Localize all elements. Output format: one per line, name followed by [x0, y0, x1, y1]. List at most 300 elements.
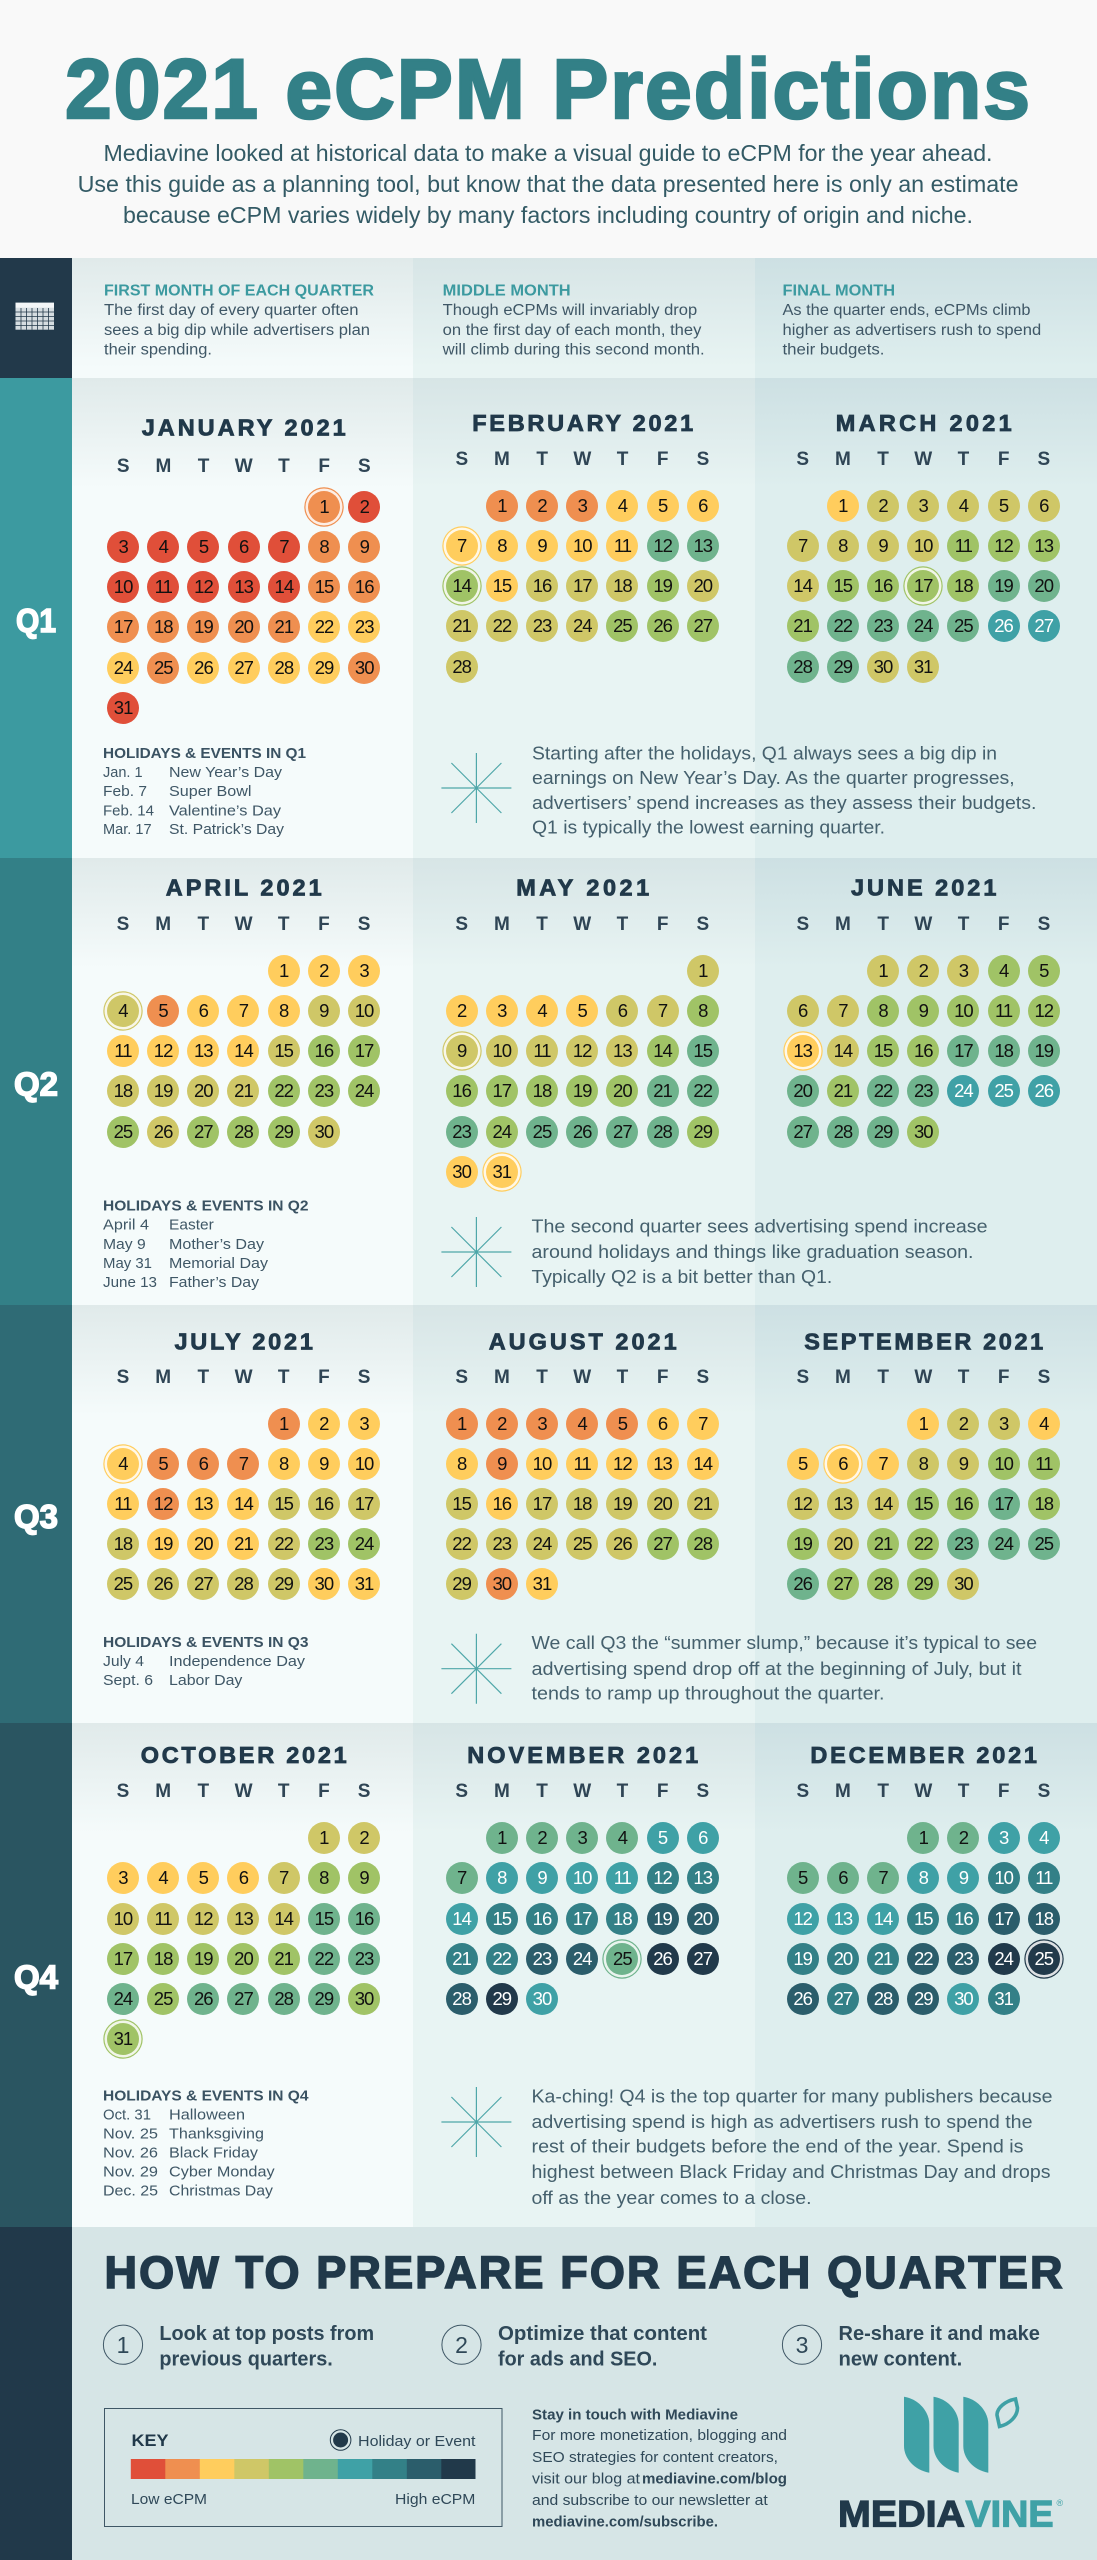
text: 7 — [658, 1000, 667, 1021]
text: 27 — [653, 1533, 672, 1554]
text: 8 — [838, 535, 847, 556]
text: 16 — [533, 575, 551, 596]
text: 17 — [114, 1948, 132, 1969]
text: 12 — [194, 1908, 213, 1929]
text: 22 — [452, 1533, 471, 1554]
text: 14 — [234, 1040, 253, 1061]
text: 3 — [359, 1413, 369, 1434]
text: 19 — [793, 1533, 812, 1554]
text: 11 — [614, 1867, 631, 1888]
calendar: February 2021 — [442, 410, 719, 683]
text: 1 — [878, 960, 888, 981]
calendar: December 2021 — [787, 1742, 1064, 2015]
text: 14 — [274, 1908, 293, 1929]
text: 22 — [833, 615, 852, 636]
title: 2021 eCPM Predictions — [65, 42, 1030, 136]
text: T — [536, 1781, 548, 1802]
text: 9 — [457, 1040, 466, 1061]
text: 30 — [492, 1573, 511, 1594]
text: 27 — [694, 615, 712, 636]
text: 23 — [355, 616, 374, 637]
text: 8 — [497, 535, 507, 556]
text: 12 — [793, 1908, 812, 1929]
text: W — [914, 1367, 932, 1388]
text: 10 — [994, 1453, 1013, 1474]
text: 18 — [613, 575, 632, 596]
text: first month of each quarter: The first day of every quarter often — [104, 302, 358, 319]
text: 24 — [994, 1533, 1013, 1554]
text: 10 — [914, 535, 932, 556]
text: S — [696, 914, 709, 935]
text: T — [198, 1781, 209, 1802]
text: 23 — [492, 1533, 511, 1554]
text: 17 — [914, 575, 932, 596]
text: 20 — [194, 1080, 213, 1101]
icon: star Q3 — [441, 1634, 511, 1704]
text: 4 — [158, 1867, 168, 1888]
text: 7 — [457, 1867, 466, 1888]
text: W — [573, 1367, 591, 1388]
text: 10 — [114, 1908, 132, 1929]
text: 11 — [533, 1040, 551, 1061]
text: 29 — [833, 656, 852, 677]
step 3: new content. — [838, 2349, 962, 2371]
text: 13 — [653, 1453, 672, 1474]
text: 29 — [914, 1988, 933, 2009]
text: 11 — [1035, 1867, 1052, 1888]
holidays list: Q1: Feb. 14 — [103, 802, 154, 820]
text: 13 — [234, 576, 253, 597]
text: 15 — [452, 1493, 471, 1514]
text: 18 — [154, 1948, 172, 1969]
text: 28 — [874, 1573, 892, 1594]
text: 1 — [319, 496, 329, 517]
text: 28 — [693, 1533, 712, 1554]
text: S — [796, 1367, 809, 1388]
text: 13 — [834, 1493, 852, 1514]
text: M — [835, 449, 851, 470]
holidays list: Q1: Mar. 17 — [103, 821, 152, 838]
text: 30 — [315, 1121, 333, 1142]
text: 6 — [239, 1867, 248, 1888]
text: 12 — [613, 1453, 632, 1474]
text: 25 — [114, 1573, 132, 1594]
holidays list: Q2 — [103, 1198, 308, 1291]
text: MARCH 2021 — [835, 410, 1011, 436]
text: 23 — [914, 1080, 933, 1101]
text: 28 — [274, 1988, 293, 2009]
text: 6 — [698, 495, 707, 516]
text: 23 — [315, 1080, 333, 1101]
text: 7 — [279, 536, 288, 557]
text: 21 — [275, 616, 293, 637]
text: 28 — [234, 1573, 253, 1594]
text: S — [1038, 914, 1050, 935]
text: S — [455, 449, 468, 470]
text: 21 — [874, 1533, 892, 1554]
text: 20 — [693, 1908, 712, 1929]
text: middle month: will climb during this second month. — [442, 342, 705, 358]
step 2: 2 — [455, 2332, 468, 2358]
text: 10 — [573, 1867, 591, 1888]
text: 11 — [114, 1040, 132, 1061]
text: 18 — [1035, 1493, 1053, 1514]
text: T — [958, 1781, 969, 1802]
holidays list: Q4: Nov. 26 — [103, 2144, 158, 2162]
text: 29 — [315, 1988, 333, 2009]
text: S — [358, 914, 370, 935]
holidays list: Q2: April 4 — [103, 1216, 149, 1234]
text: 12 — [194, 576, 213, 597]
text: 13 — [793, 1040, 812, 1061]
text: 2 — [359, 1827, 369, 1848]
text: 3 — [959, 960, 968, 981]
text: S — [796, 1781, 809, 1802]
holidays list: Q2: Memorial Day — [169, 1255, 269, 1272]
text: 31 — [114, 697, 132, 718]
text: first month of each quarter: FIRST MONTH OF EACH QUARTER — [104, 282, 374, 300]
text: 29 — [492, 1988, 511, 2009]
text: F — [998, 914, 1010, 935]
text: 7 — [279, 1867, 288, 1888]
holidays list: Q3: HOLIDAYS & EVENTS IN Q3 — [103, 1634, 308, 1651]
text: 8 — [279, 1000, 288, 1021]
text: 13 — [1034, 535, 1053, 556]
text: 14 — [452, 1908, 471, 1929]
text: 17 — [114, 616, 132, 637]
icon: star Q4 — [441, 2087, 511, 2157]
text: 21 — [274, 1948, 293, 1969]
text: 3 — [118, 1867, 128, 1888]
text: 23 — [533, 615, 551, 636]
text: 24 — [492, 1121, 511, 1142]
text: M — [155, 456, 171, 477]
text: 9 — [878, 535, 888, 556]
text: 1 — [319, 1827, 328, 1848]
text: T — [198, 456, 209, 477]
text: 8 — [497, 1867, 506, 1888]
text: 4 — [618, 1827, 627, 1848]
text: JUNE 2021 — [851, 874, 996, 900]
text: W — [235, 1367, 253, 1388]
text: final month: FINAL MONTH — [782, 282, 895, 300]
text: 19 — [653, 1908, 672, 1929]
text: 2 — [537, 1827, 547, 1848]
text: 4 — [159, 536, 168, 557]
text: 12 — [573, 1040, 591, 1061]
key legend: High eCPM — [395, 2491, 475, 2508]
text: 5 — [158, 1453, 168, 1474]
text: 21 — [834, 1080, 852, 1101]
text: T — [877, 449, 889, 470]
paragraph: Q4 — [532, 2087, 1052, 2208]
text: 6 — [838, 1453, 848, 1474]
text: 30 — [954, 1573, 973, 1594]
band: Q2 background — [0, 858, 1097, 1305]
text: 15 — [492, 1908, 511, 1929]
text: 13 — [234, 1908, 253, 1929]
text: 20 — [834, 1948, 852, 1969]
text: 2 — [457, 1000, 466, 1021]
text: 29 — [315, 657, 333, 678]
calendar: May 2021 — [442, 874, 719, 1192]
text: 9 — [919, 1000, 928, 1021]
text: 17 — [492, 1080, 511, 1101]
text: 25 — [1035, 1948, 1053, 1969]
text: T — [198, 914, 209, 935]
text: stay in touch: mediavine.com/subscribe. — [532, 2514, 718, 2531]
text: T — [617, 914, 628, 935]
text: 7 — [457, 535, 466, 556]
text: 2 — [319, 960, 328, 981]
text: 5 — [798, 1453, 807, 1474]
text: M — [835, 1367, 851, 1388]
text: 14 — [874, 1493, 892, 1514]
text: 18 — [533, 1080, 551, 1101]
text: 25 — [154, 1988, 172, 2009]
text: 1 — [279, 1413, 288, 1434]
key legend: Low eCPM — [131, 2491, 207, 2508]
text: 1 — [919, 1413, 928, 1434]
holidays list: Q2: Father’s Day — [169, 1274, 260, 1291]
text: 2 — [878, 495, 888, 516]
text: 26 — [154, 1573, 172, 1594]
paragraph: Q4: highest between Black Friday and Christmas Day and drops — [532, 2162, 1050, 2182]
holidays list: Q1: St. Patrick’s Day — [169, 821, 285, 838]
text: 7 — [838, 1000, 848, 1021]
holidays list: Q1: New Year’s Day — [169, 764, 283, 781]
paragraph: Q2: around holidays and things like graduation season. — [532, 1242, 974, 1262]
text: F — [657, 1367, 668, 1388]
text: 13 — [194, 1040, 213, 1061]
text: 26 — [653, 615, 672, 636]
text: 1 — [919, 1827, 928, 1848]
text: 2 — [537, 495, 547, 516]
text: W — [235, 914, 253, 935]
text: 29 — [452, 1573, 471, 1594]
text: 24 — [914, 615, 932, 636]
text: 9 — [319, 1453, 328, 1474]
icon: star Q1 — [441, 753, 511, 823]
text: 9 — [537, 535, 547, 556]
text: M — [835, 1781, 851, 1802]
text: 12 — [994, 535, 1013, 556]
text: stay in touch — [532, 2406, 787, 2531]
text: F — [657, 914, 668, 935]
paragraph: Q1: advertisers’ spend increases as they assess their budgets. — [532, 793, 1036, 813]
text: 2 — [959, 1413, 968, 1434]
text: 2 — [959, 1827, 968, 1848]
text: 11 — [114, 1493, 132, 1514]
holidays list: Q4: Black Friday — [169, 2144, 259, 2162]
text: 8 — [698, 1000, 707, 1021]
text: S — [696, 1367, 709, 1388]
text: 3 — [537, 1413, 547, 1434]
holidays list: Q4: HOLIDAYS & EVENTS IN Q4 — [103, 2088, 309, 2104]
text: 21 — [874, 1948, 892, 1969]
key legend: Holiday or Event — [358, 2433, 476, 2450]
text: 8 — [279, 1453, 288, 1474]
text: T — [877, 914, 889, 935]
text: 19 — [1035, 1040, 1053, 1061]
text: T — [958, 1367, 969, 1388]
paragraph: Q2: Typically Q2 is a bit better than Q1. — [532, 1267, 832, 1287]
text: 25 — [573, 1533, 591, 1554]
text: 4 — [1039, 1413, 1048, 1434]
holidays list: Q3: Independence Day — [169, 1653, 306, 1670]
text: T — [617, 1367, 628, 1388]
holidays list: Q4: Nov. 29 — [103, 2164, 158, 2180]
paragraph: Q2: The second quarter sees advertising spend increase — [532, 1217, 988, 1237]
text: 31 — [914, 656, 932, 677]
text: NOVEMBER 2021 — [467, 1742, 698, 1768]
text: FEBRUARY 2021 — [472, 410, 693, 436]
text: 28 — [452, 1988, 471, 2009]
text: 20 — [234, 1948, 253, 1969]
text: 24 — [573, 615, 592, 636]
text: W — [573, 449, 591, 470]
text: T — [958, 914, 969, 935]
text: 15 — [315, 1908, 333, 1929]
text: 22 — [493, 615, 511, 636]
band: header intro background — [0, 258, 1097, 378]
text: 3 — [359, 960, 369, 981]
text: 18 — [954, 575, 973, 596]
text: MAY 2021 — [516, 874, 649, 900]
text: 22 — [914, 1533, 933, 1554]
text: T — [278, 1781, 290, 1802]
text: middle month — [442, 282, 705, 358]
text: 3 — [999, 1827, 1008, 1848]
text: 20 — [793, 1080, 812, 1101]
text: 18 — [114, 1080, 132, 1101]
text: S — [358, 456, 371, 477]
text: 3 — [999, 1413, 1008, 1434]
text: S — [358, 1781, 370, 1802]
text: 30 — [315, 1573, 333, 1594]
text: 24 — [355, 1080, 373, 1101]
text: 23 — [355, 1948, 373, 1969]
text: M — [155, 914, 171, 935]
text: 19 — [994, 575, 1013, 596]
text: 22 — [274, 1080, 293, 1101]
text: 8 — [457, 1453, 466, 1474]
intro text: because eCPM varies widely by many factors including country of origin and niche. — [123, 202, 973, 228]
calendar: July 2021 — [103, 1328, 380, 1600]
intro text — [78, 140, 1019, 228]
text: 6 — [618, 1000, 627, 1021]
text: 5 — [158, 1000, 168, 1021]
logo: Mediavine: VINE — [966, 2494, 1054, 2535]
text: 22 — [492, 1948, 511, 1969]
text: 26 — [994, 615, 1013, 636]
text: 8 — [878, 1000, 888, 1021]
text: 31 — [994, 1988, 1013, 2009]
label: Q4: Q4 — [14, 1958, 59, 1996]
text: 13 — [694, 535, 712, 556]
text: 5 — [658, 1827, 667, 1848]
text: 16 — [315, 1040, 333, 1061]
text: 29 — [274, 1121, 293, 1142]
text: 9 — [537, 1867, 547, 1888]
text: T — [536, 1367, 548, 1388]
text: 26 — [793, 1573, 812, 1594]
text: 4 — [118, 1453, 128, 1474]
text: 30 — [355, 1988, 373, 2009]
text: S — [696, 1781, 709, 1802]
text: W — [235, 456, 253, 477]
text: F — [318, 1367, 330, 1388]
text: 9 — [359, 1867, 369, 1888]
text: 14 — [834, 1040, 852, 1061]
text: M — [494, 449, 510, 470]
text: 19 — [653, 575, 672, 596]
text: 3 — [118, 536, 128, 557]
text: 2 — [319, 1413, 328, 1434]
calendar: January 2021 — [107, 414, 380, 724]
text: W — [573, 914, 591, 935]
paragraph: Q3 — [532, 1633, 1037, 1704]
text: 18 — [573, 1493, 591, 1514]
text: 30 — [452, 1161, 471, 1182]
holidays list: Q3: Sept. 6 — [103, 1672, 153, 1689]
text: 7 — [798, 535, 807, 556]
text: S — [1038, 1367, 1050, 1388]
text: 25 — [533, 1121, 551, 1142]
text: 24 — [114, 1988, 132, 2009]
text: 21 — [452, 615, 471, 636]
text: S — [117, 1781, 129, 1802]
text: 11 — [995, 1000, 1012, 1021]
text: T — [536, 449, 548, 470]
text: 24 — [573, 1948, 591, 1969]
text: 6 — [239, 536, 248, 557]
paragraph: Q1: Starting after the holidays, Q1 always sees a big dip in — [532, 743, 997, 763]
text: stay in touch: Stay in touch with Mediavine — [532, 2406, 738, 2424]
text: 27 — [793, 1121, 812, 1142]
text: 21 — [452, 1948, 471, 1969]
text: M — [835, 914, 851, 935]
paragraph: Q2 — [532, 1217, 988, 1287]
text: 8 — [319, 536, 329, 557]
text: 11 — [955, 535, 972, 556]
text: 1 — [497, 495, 507, 516]
text: M — [155, 1367, 171, 1388]
text: S — [117, 914, 129, 935]
text: 14 — [874, 1908, 892, 1929]
text: 4 — [1039, 1827, 1048, 1848]
holidays list: Q4 — [103, 2088, 309, 2200]
text: S — [455, 1367, 468, 1388]
holidays list: Q1: Jan. 1 — [103, 764, 143, 781]
text: 9 — [497, 1453, 506, 1474]
text: 23 — [533, 1948, 551, 1969]
text: 16 — [954, 1908, 973, 1929]
text: F — [998, 449, 1009, 470]
text: 29 — [693, 1121, 712, 1142]
text: 11 — [154, 1908, 172, 1929]
label: Q1: Q1 — [16, 602, 56, 639]
text: 26 — [194, 1988, 213, 2009]
text: 8 — [919, 1867, 928, 1888]
text: final month: higher as advertisers rush to spend — [782, 322, 1041, 339]
text: 9 — [959, 1453, 968, 1474]
holidays list: Q4: Halloween — [169, 2106, 245, 2124]
step 1: 1 — [117, 2332, 129, 2358]
text: stay in touch: For more monetization, blogging and — [532, 2427, 787, 2444]
text: 17 — [355, 1493, 373, 1514]
step 2 — [442, 2323, 707, 2371]
